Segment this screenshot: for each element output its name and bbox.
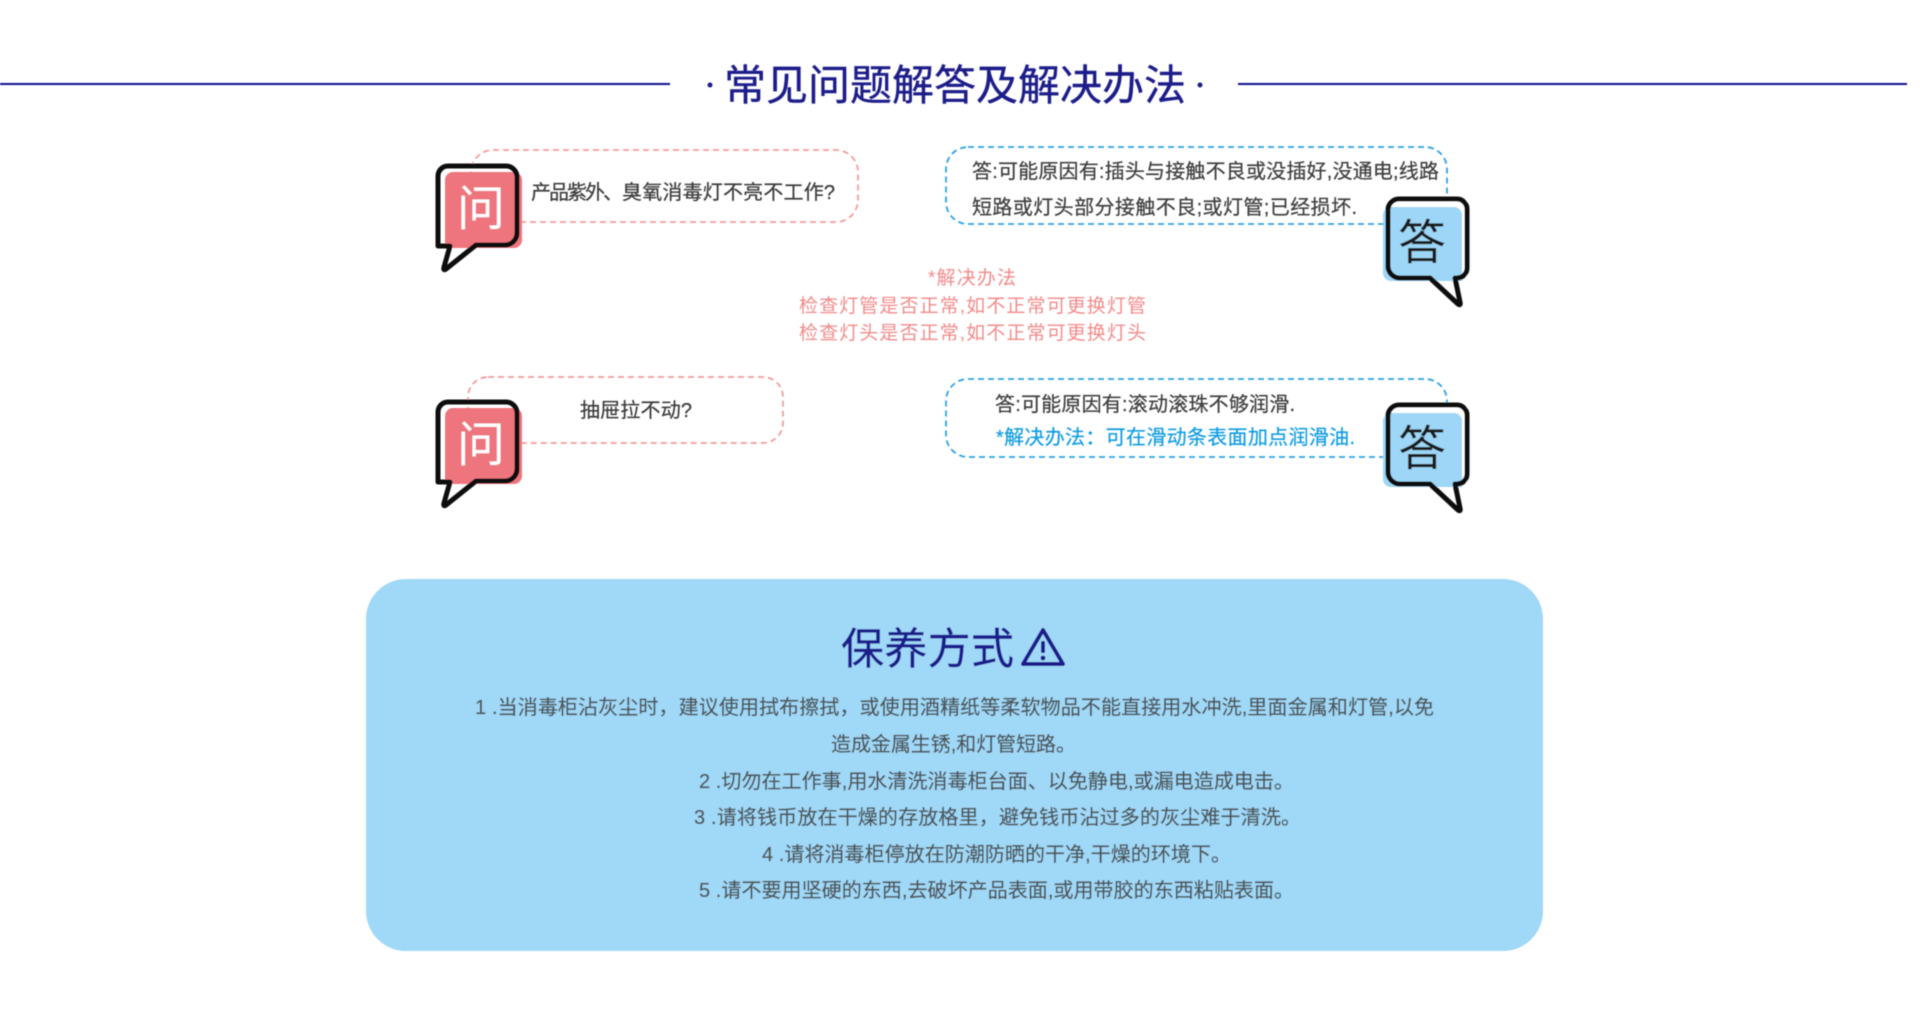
question 2 dashed bubble (468, 377, 783, 443)
answer 1 text (972, 160, 1439, 219)
question 1 (438, 150, 858, 270)
red solution note: 检查灯管是否正常,如不正常可更换灯管 (799, 295, 1146, 317)
heading: FAQ title with side rules: 常见问题解答及解决办法 (724, 62, 1186, 109)
answer 2 solution text: *解决办法：可在滑动条表面加点润滑油. (996, 426, 1355, 449)
answer 1 text: 短路或灯头部分接触不良;或灯管;已经损坏. (972, 196, 1357, 219)
question 1 text: 产品紫外、 (531, 181, 623, 204)
question 1 text (531, 181, 835, 204)
heading: FAQ title with side rules (0, 62, 1907, 109)
icon: answer speech bubble 1: 答 (1398, 217, 1446, 270)
icon: question speech bubble 2 (438, 402, 522, 506)
icon: question speech bubble 1 (438, 166, 522, 270)
maintenance list: 4 .请将消毒柜停放在防潮防晒的干净,干燥的环境下。 (762, 843, 1231, 866)
question 1 dashed bubble (471, 150, 858, 222)
icon: answer speech bubble 1 (1383, 199, 1468, 305)
maintenance list: 1 .当消毒柜沾灰尘时，建议使用拭布擦拭，或使用酒精纸等柔软物品不能直接用水冲洗,里面金属和灯管,以免 (475, 696, 1434, 719)
panel heading: 保养方式 (841, 626, 1014, 674)
answer 1 text: 答:可能原因有:插头与接触不良或没插好,没通电;线路 (972, 160, 1439, 183)
question 1 text: 臭氧消毒灯不亮不工作? (622, 181, 835, 204)
question 2 text: 抽屉拉不动? (580, 399, 692, 422)
answer 2 dashed bubble (946, 379, 1447, 457)
icon: warning triangle (1023, 630, 1063, 664)
red solution note: *解决办法 (928, 267, 1016, 289)
maintenance list: 2 .切勿在工作事,用水清洗消毒柜台面、以免静电,或漏电造成电击。 (699, 770, 1294, 793)
red solution note (799, 267, 1146, 344)
icon: answer speech bubble 2: 答 (1398, 423, 1446, 476)
answer 1 dashed bubble (946, 147, 1447, 224)
icon: question speech bubble 1: 问 (457, 183, 505, 236)
maintenance list: 造成金属生锈,和灯管短路。 (831, 733, 1076, 756)
red solution note: 检查灯头是否正常,如不正常可更换灯头 (799, 322, 1146, 344)
question 2 (438, 377, 783, 506)
icon: answer speech bubble 2 (1383, 405, 1468, 511)
icon: question speech bubble 2: 问 (457, 419, 505, 472)
maintenance list (475, 696, 1434, 902)
maintenance list: 3 .请将钱币放在干燥的存放格里，避免钱币沾过多的灰尘难于清洗。 (694, 806, 1301, 829)
answer 2 (946, 379, 1468, 511)
answer 2 cause text: 答:可能原因有:滚动滚珠不够润滑. (995, 393, 1295, 416)
answer 1 (946, 147, 1468, 305)
maintenance list: 5 .请不要用坚硬的东西,去破坏产品表面,或用带胶的东西粘贴表面。 (699, 879, 1294, 902)
panel: maintenance (366, 579, 1543, 951)
